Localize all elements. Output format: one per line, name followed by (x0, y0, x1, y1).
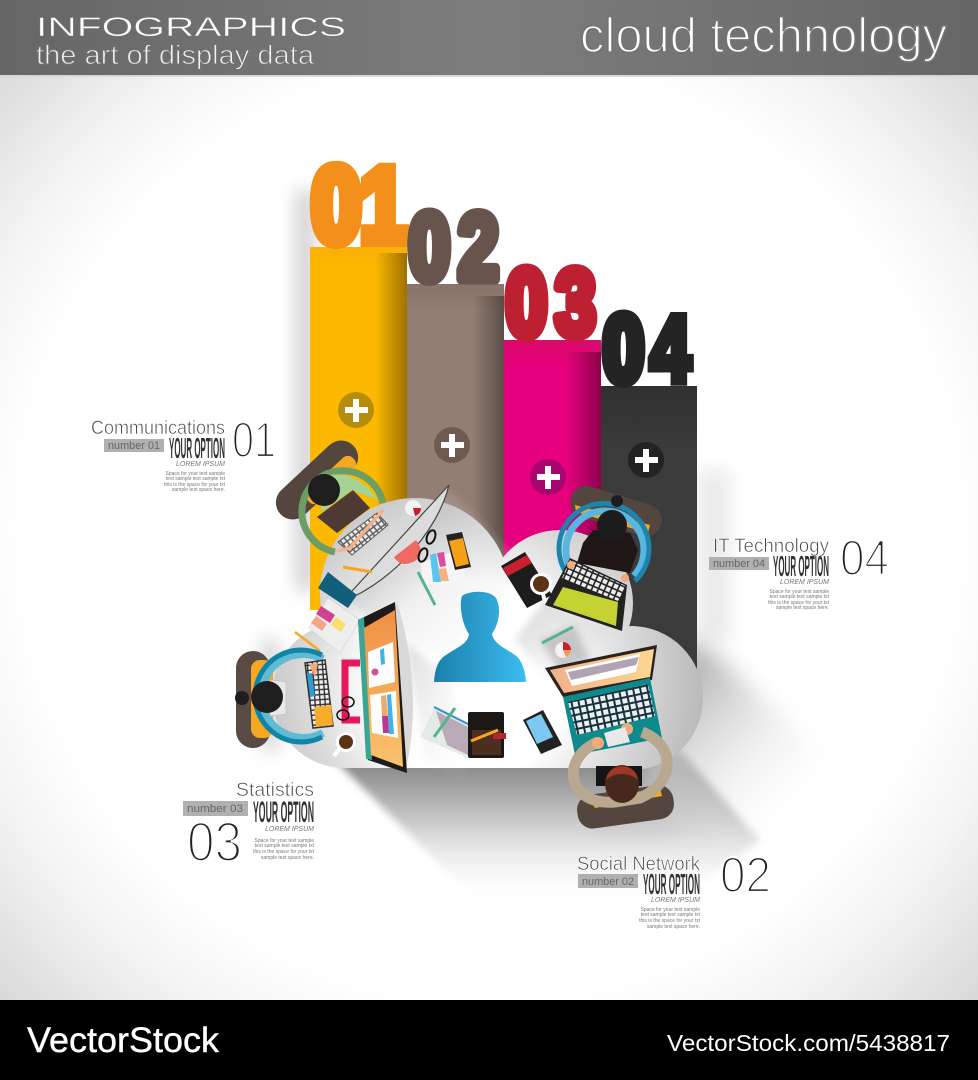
chair (269, 433, 365, 527)
hands (592, 737, 604, 749)
heading: IT Technology (713, 536, 829, 557)
text: YOUR OPTION (253, 796, 314, 829)
large monitor (358, 602, 413, 773)
cloud (272, 498, 703, 770)
person 4 laptop (545, 645, 676, 831)
numbered bars (310, 147, 697, 676)
bar 03: 3 (555, 250, 596, 355)
chair (566, 482, 666, 540)
soft shadows behind bars and cloud (262, 190, 730, 835)
copy (639, 907, 701, 930)
tag: number 02 (582, 876, 634, 888)
person 2 left at desk (235, 650, 333, 748)
copy: text sample text sample txt (641, 912, 701, 918)
bar 01 (310, 147, 407, 610)
head (597, 510, 627, 540)
desk items bottom (420, 707, 562, 758)
lorem: LOREM IPSUM (176, 461, 225, 468)
copy (253, 838, 315, 861)
tag: number 04 (713, 558, 765, 570)
person 1 at desk (269, 433, 388, 555)
laptop screen (545, 558, 627, 631)
header topic: cloud technology (580, 9, 947, 63)
person icon (434, 592, 526, 682)
heading: Statistics (236, 780, 314, 801)
keyboard (305, 660, 333, 728)
copy: text sample text sample txt (255, 843, 315, 849)
number: 04 (840, 530, 889, 586)
header title: INFOGRAPHICS (36, 12, 346, 42)
block: Communications: YOUR OPTION (169, 433, 225, 465)
bar 01: 0 (312, 147, 360, 264)
copy: Space for your text sample (255, 838, 314, 844)
number: 01 (232, 412, 276, 468)
pink stand with glasses (337, 663, 360, 720)
book and coffee (501, 552, 552, 608)
copy: Space for your text sample (641, 907, 700, 913)
chair (575, 783, 676, 831)
footer url: VectorStock.com/5438817 (667, 1030, 950, 1056)
copy: text sample text sample txt (166, 476, 226, 482)
bar 04 (601, 296, 697, 676)
copy: sample text space here. (647, 924, 700, 930)
lorem: LOREM IPSUM (780, 579, 829, 586)
bar 02: 2 (458, 194, 499, 299)
head (605, 765, 639, 803)
bar 04: 4 (650, 296, 691, 401)
pie and pencil (542, 627, 573, 658)
heading: Communications (91, 418, 225, 439)
lorem: LOREM IPSUM (265, 826, 314, 833)
header band (0, 0, 978, 77)
keyboard (338, 513, 388, 555)
bar 02: 0 (409, 194, 450, 299)
copy: this is the space for your txt (768, 600, 830, 606)
footer band (0, 1000, 978, 1080)
block: Statistics (183, 780, 315, 873)
tag: number 01 (108, 440, 160, 452)
desk monitor (342, 485, 449, 602)
copy: sample text space here. (776, 605, 829, 611)
tag: number 03 (187, 803, 243, 815)
person 3 top right (545, 482, 666, 631)
number: 03 (187, 810, 242, 873)
block: IT Technology (709, 530, 889, 611)
block: Social Network: YOUR OPTION (643, 869, 700, 901)
plus icons (338, 392, 664, 495)
bar 04: 0 (603, 296, 644, 401)
bar 03: 0 (506, 250, 547, 355)
head (308, 474, 340, 506)
lorem: LOREM IPSUM (651, 897, 700, 904)
desk items top (295, 500, 471, 653)
chair (236, 651, 270, 748)
heading: Social Network (577, 854, 700, 875)
header subtitle: the art of display data (36, 40, 315, 70)
copy: this is the space for your txt (253, 849, 315, 855)
arms (573, 732, 667, 802)
copy (768, 589, 830, 611)
footer logo: VectorStock (27, 1021, 220, 1060)
bar 03 (504, 250, 601, 580)
copy: sample text space here. (261, 855, 314, 861)
copy: this is the space for your txt (639, 918, 701, 924)
copy: sample text space here. (172, 487, 225, 493)
block: IT Technology: YOUR OPTION (773, 551, 829, 583)
laptop (545, 645, 657, 697)
keys (562, 560, 626, 601)
copy: text sample text sample txt (770, 594, 830, 600)
bar 02 (407, 194, 504, 586)
block: Communications (91, 412, 276, 493)
number: 02 (720, 847, 771, 903)
copy: Space for your text sample (770, 589, 829, 595)
block: Social Network (577, 847, 771, 930)
coffee cup left (334, 732, 356, 756)
copy (164, 471, 226, 493)
copy: Space for your text sample (166, 471, 225, 477)
head (251, 681, 283, 713)
bar 01: 1 (360, 147, 407, 264)
copy: this is the space for your txt (164, 482, 226, 488)
long shadow under cloud (325, 640, 860, 915)
item shadows on cloud (345, 490, 620, 785)
